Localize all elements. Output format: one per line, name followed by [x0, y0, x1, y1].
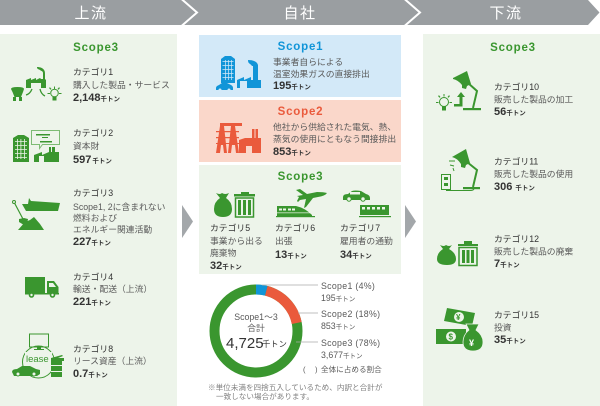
text: category 3: 燃料および: [73, 212, 117, 223]
icon: investment money: ¥: [469, 338, 474, 348]
text: category 2: 資本財: [73, 140, 100, 151]
heading: upstream Scope3: Scope3: [73, 42, 119, 54]
legend: Scope3: Scope3 (78%): [321, 338, 380, 348]
icon: investment money: ¥: [456, 313, 461, 322]
legend: Scope2: 853千トン: [321, 321, 355, 331]
text: category 10: 販売した製品の加工: [494, 94, 573, 104]
icon: product use lamp: [442, 149, 480, 190]
text: category 5: 32千トン: [210, 260, 242, 272]
text: category 15: [494, 309, 539, 346]
legend: Scope1: [321, 281, 375, 303]
panel: Scope2: [199, 100, 401, 162]
text: category 15: カテゴリ15: [494, 309, 539, 320]
heading: Scope1: Scope1: [278, 41, 323, 53]
icon: building factory car: [216, 56, 261, 92]
text: category 12: [494, 233, 573, 270]
legend: Scope3: [321, 338, 380, 360]
text: category 2: カテゴリ2: [73, 127, 113, 138]
header label: upstream: 上流: [74, 5, 108, 22]
heading: Scope2: Scope2: [278, 106, 323, 118]
panel: downstream: [423, 34, 600, 406]
icon: leased assets: lease: [26, 354, 49, 365]
text: category 3: カテゴリ3: [73, 187, 113, 198]
legend: Scope3: 3,677千トン: [321, 350, 363, 360]
text: category 11: 306 千トン: [494, 181, 535, 193]
text: category 8: カテゴリ8: [73, 343, 113, 354]
header bar: full process band: [0, 0, 600, 26]
donut chart: [214, 290, 298, 372]
icon: purchased goods: [11, 67, 62, 101]
text: category 5: 事業から出る: [210, 235, 263, 246]
text: category 7: カテゴリ7: [340, 222, 380, 233]
text: category 1: 購入した製品・サービス: [73, 79, 170, 90]
header label: own company: 自社: [283, 5, 317, 22]
text: category 4: [73, 271, 152, 308]
text: category 2: 597千トン: [73, 154, 112, 166]
text: category 12: 販売した製品の廃棄: [494, 246, 573, 256]
leader lines: [262, 285, 318, 342]
text: category 2: [73, 127, 113, 166]
icon: capital goods: [13, 130, 60, 162]
icon: processing lamp: [436, 71, 481, 110]
icon: fuel and energy: [12, 198, 60, 230]
text: Scope2 description: 他社から供給された電気、熱、: [273, 121, 396, 132]
text: category 11: 販売した製品の使用: [494, 168, 573, 179]
text: category 3: [73, 187, 166, 248]
donut total: Scope1〜3: [234, 312, 278, 322]
donut total: 4,725: [226, 335, 264, 352]
text: category 3: Scope1, 2に含まれない: [73, 202, 166, 212]
text: category 5: カテゴリ5: [210, 222, 250, 233]
text: category 4: カテゴリ4: [73, 271, 113, 282]
text: category 11: カテゴリ11: [494, 156, 538, 166]
legend: Scope1: 195千トン: [321, 293, 355, 303]
header label: downstream: 下流: [489, 5, 523, 22]
panel: Scope3 own: [199, 165, 401, 274]
legend note: 全体に占める割合: [321, 364, 382, 374]
footnote: 一致しない場合があります。: [216, 391, 314, 401]
text: category 11: [494, 156, 573, 193]
heading: Scope3: Scope3: [278, 171, 323, 183]
legend: Scope2: [321, 309, 380, 331]
icon: investment money: [436, 308, 483, 351]
text: category 4: 221千トン: [73, 296, 111, 308]
footnote: ※単位未満を四捨五入しているため、内訳と合計が: [208, 382, 383, 392]
text: category 12: 7千トン: [494, 258, 520, 270]
panel: upstream: [0, 34, 177, 406]
text: category 10: 56千トン: [494, 106, 526, 118]
text: Scope2 description: [273, 121, 396, 158]
text: category 7: 34千トン: [340, 249, 372, 261]
text: category 10: カテゴリ10: [494, 81, 539, 92]
icon: car and train: [343, 190, 391, 217]
arrow: upstream to own: [182, 205, 193, 238]
legend note: [303, 364, 382, 374]
text: category 6: [275, 222, 315, 261]
text: category 7: [340, 222, 393, 261]
text: Scope2 description: 853千トン: [273, 146, 311, 158]
text: category 1: 2,148千トン: [73, 92, 121, 104]
text: category 15: 投資: [494, 322, 512, 332]
text: category 8: リース資産（上流）: [73, 355, 152, 366]
donut total: 千トン: [262, 339, 287, 349]
icon: disposal bag and bin: [437, 241, 478, 266]
text: category 8: [73, 343, 152, 380]
text: category 15: 35千トン: [494, 334, 526, 346]
text: category 5: 廃棄物: [210, 247, 237, 258]
footnote: [208, 382, 383, 401]
panel: Scope1: [199, 35, 401, 97]
icon: waste bag and bin: [214, 192, 255, 217]
heading: downstream Scope3: Scope3: [490, 42, 536, 54]
legend note: ): [315, 365, 318, 374]
text: category 1: [73, 66, 170, 104]
text: category 6: 13千トン: [275, 249, 307, 261]
text: category 6: 出張: [275, 235, 293, 246]
text: category 5: [210, 222, 263, 272]
text: Scope1 description: [273, 56, 370, 92]
icon: transmission towers and factory: [216, 123, 261, 153]
text: Scope1 description: 事業者自らによる: [273, 56, 343, 67]
text: category 6: カテゴリ6: [275, 222, 315, 233]
text: category 10: [494, 81, 573, 118]
icon: leased assets: [12, 334, 64, 378]
donut total: [226, 312, 287, 352]
text: category 7: 雇用者の通勤: [340, 235, 393, 246]
legend: Scope2: Scope2 (18%): [321, 309, 380, 319]
legend: Scope1: Scope1 (4%): [321, 281, 375, 291]
text: category 1: カテゴリ1: [73, 66, 113, 77]
arrow: own to downstream: [405, 205, 416, 238]
text: Scope2 description: 蒸気の使用にともなう間接排出: [273, 133, 396, 144]
icon: truck: [25, 277, 59, 298]
text: Scope1 description: 温室効果ガスの直接排出: [273, 68, 370, 79]
text: category 12: カテゴリ12: [494, 233, 539, 244]
text: category 3: エネルギー関連活動: [73, 224, 152, 234]
text: category 3: 227千トン: [73, 236, 111, 248]
donut total: 合計: [247, 322, 265, 333]
legend note: (: [303, 365, 306, 374]
text: category 4: 輸送・配送（上流）: [73, 283, 152, 294]
icon: train and plane: [276, 189, 327, 217]
icon: investment money: $: [448, 332, 454, 342]
text: Scope1 description: 195千トン: [273, 80, 311, 92]
text: category 8: 0.7千トン: [73, 368, 108, 380]
